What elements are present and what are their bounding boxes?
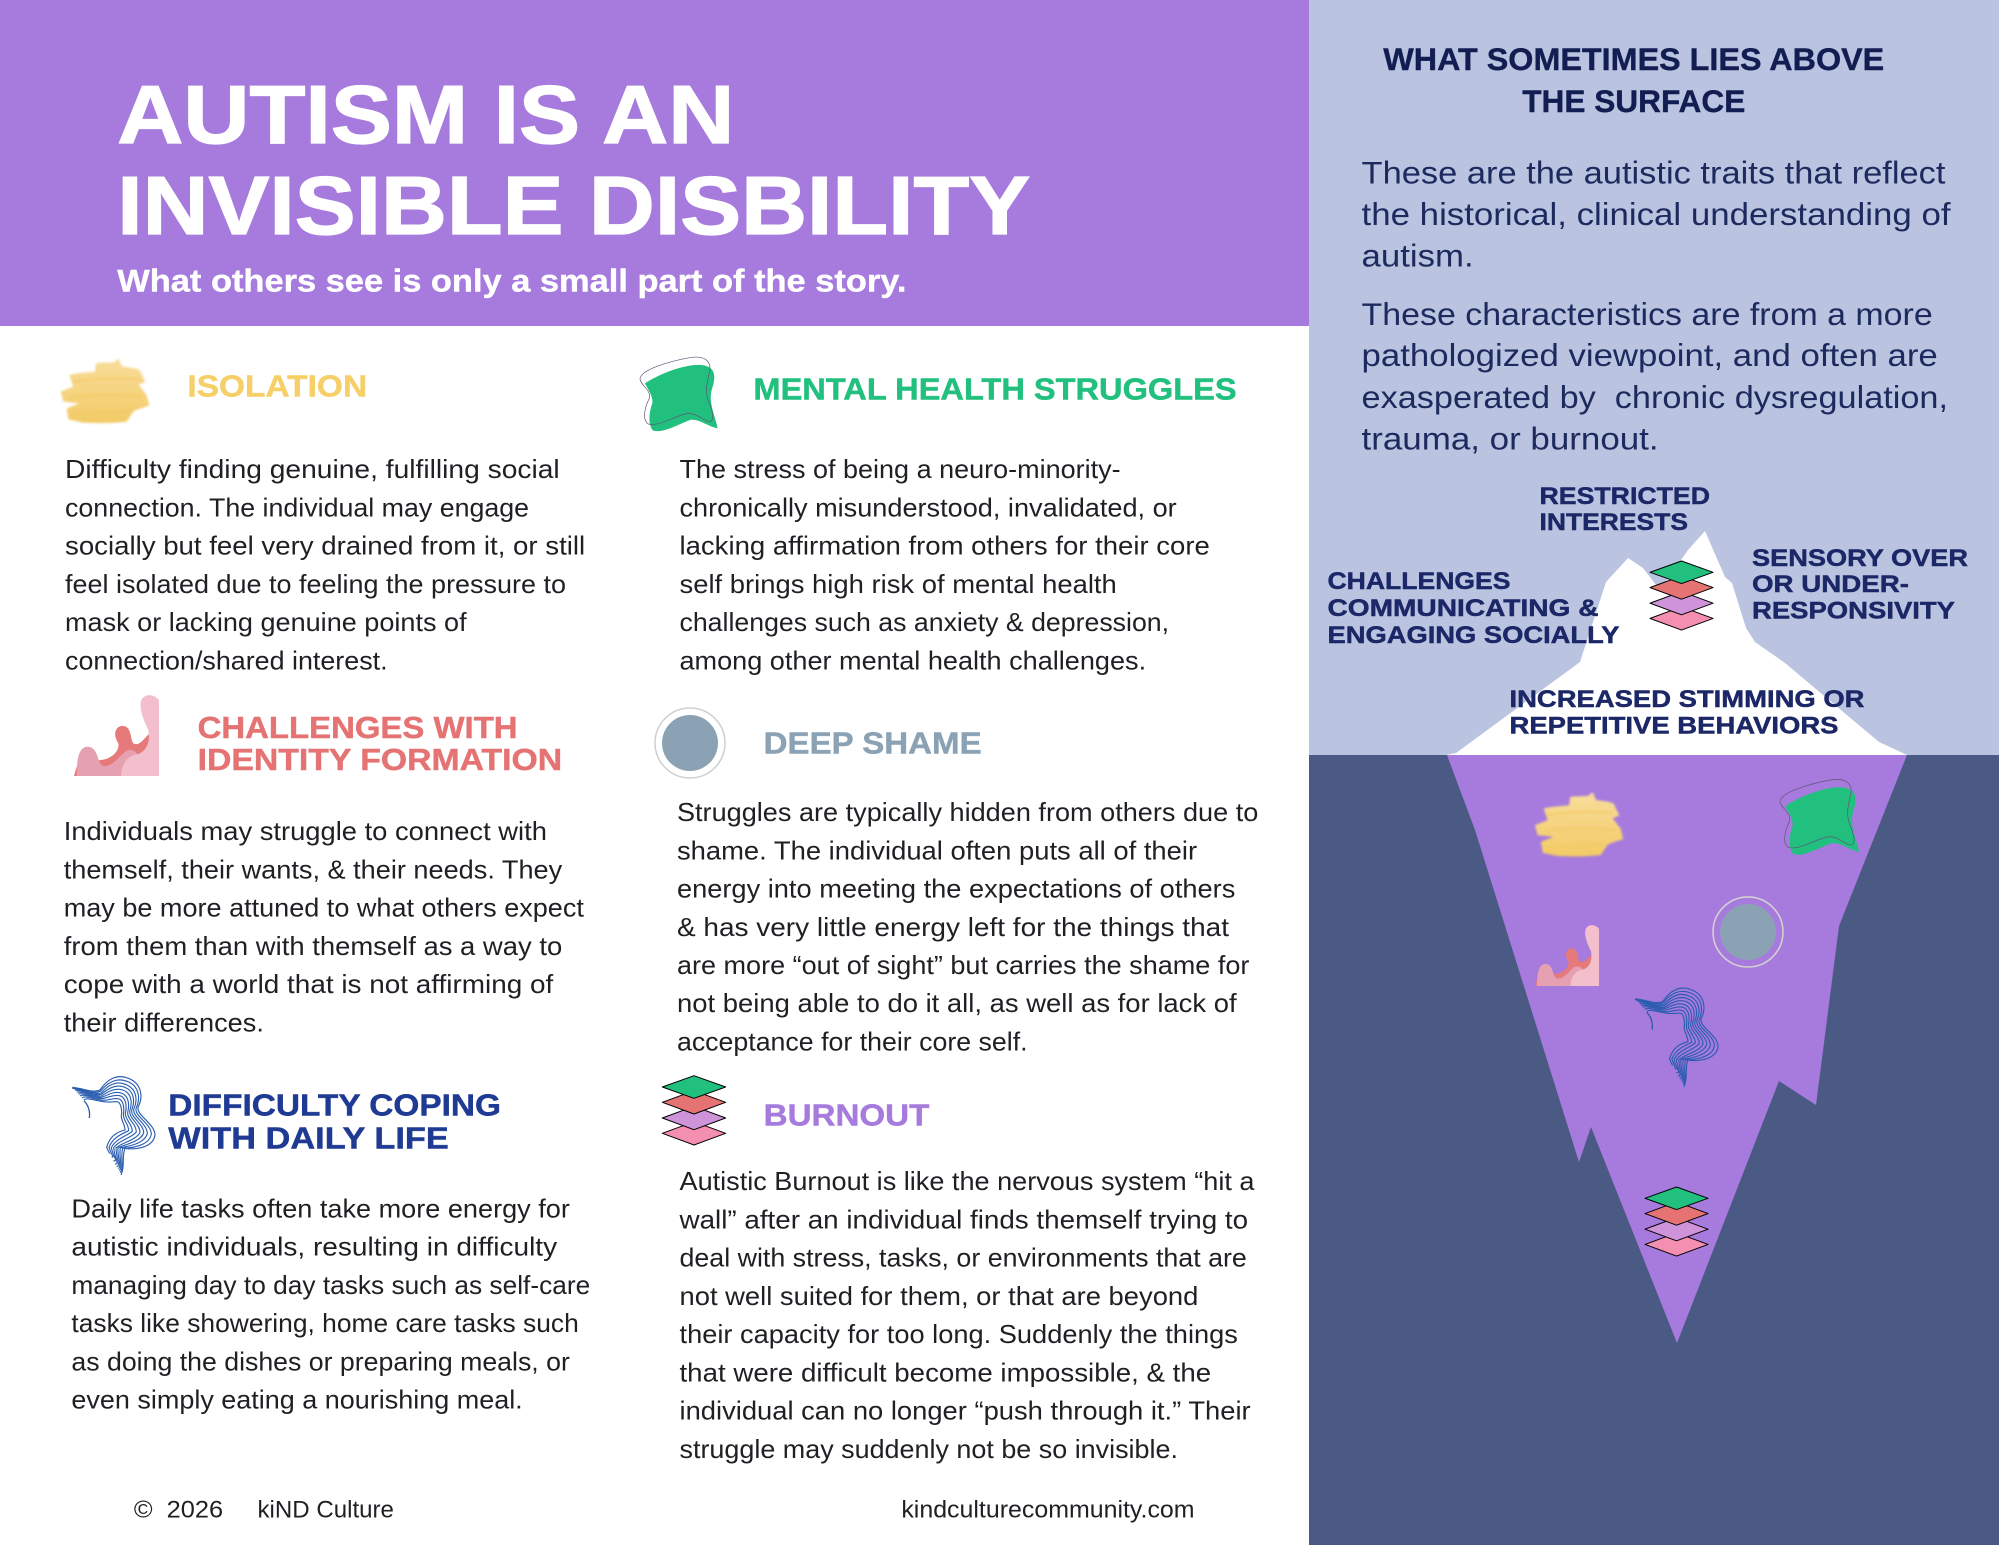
text: mental health struggles: challenges such as anxiety & depression, <box>680 607 1169 637</box>
icon: contour waves under water <box>1635 988 1718 1087</box>
text: mental health struggles <box>680 454 1210 675</box>
panel: challenges with identity formation <box>64 695 585 1037</box>
heading: isolation: ISOLATION <box>187 370 367 403</box>
text: isolation: mask or lacking genuine points of <box>65 607 467 637</box>
icon: pink waves under water <box>1535 925 1599 986</box>
text: burnout: wall” after an individual finds themself trying to <box>678 1204 1248 1234</box>
label: challenges communicating: COMMUNICATING & <box>1328 595 1598 622</box>
icon: circle under water <box>1713 897 1783 967</box>
text: burnout: not well suited for them, or that are beyond <box>680 1281 1198 1311</box>
title: AUTISM IS AN <box>117 68 734 161</box>
panel: isolation <box>61 358 585 675</box>
title: INVISIBLE DISBILITY <box>117 159 1030 252</box>
label: restricted interests: RESTRICTED <box>1540 483 1710 510</box>
text: identity formation: from them than with themself as a way to <box>64 931 562 961</box>
panel: difficulty coping with daily life <box>71 1077 590 1415</box>
text: pathologized viewpoint: trauma, or burnout. <box>1362 421 1659 456</box>
icon: grey circle <box>655 708 725 778</box>
text: difficulty coping: tasks like showering, home care tasks such <box>71 1308 579 1338</box>
text: burnout: their capacity for too long. Suddenly the things <box>680 1319 1238 1349</box>
text: difficulty coping <box>71 1194 590 1415</box>
icon: stacked layers <box>662 1076 726 1145</box>
heading: difficulty coping: WITH DAILY LIFE <box>168 1123 449 1156</box>
label: sensory responsivity: RESPONSIVITY <box>1752 598 1955 624</box>
text: isolation: feel isolated due to feeling the pressure to <box>65 569 566 599</box>
heading: identity formation: CHALLENGES WITH <box>198 712 518 745</box>
heading: burnout: BURNOUT <box>764 1100 930 1133</box>
text: deep shame: acceptance for their core self. <box>677 1026 1028 1056</box>
text: isolation: connection/shared interest. <box>65 645 388 675</box>
text: identity formation: themself, their wants, & their needs. They <box>64 854 562 884</box>
label: stimming: INCREASED STIMMING OR <box>1510 686 1864 713</box>
text: difficulty coping: even simply eating a nourishing meal. <box>71 1385 523 1415</box>
label: restricted interests <box>1540 483 1710 536</box>
panel: iceberg sidebar <box>1309 0 1999 1545</box>
text: pathologized viewpoint <box>1362 297 1948 456</box>
text: isolation: connection. The individual may engage <box>65 492 529 522</box>
text: identity formation: cope with a world that is not affirming of <box>64 969 554 999</box>
text: difficulty coping: managing day to day tasks such as self-care <box>71 1270 590 1300</box>
icon: green blob <box>640 357 718 431</box>
text: difficulty coping: as doing the dishes or preparing meals, or <box>71 1346 570 1376</box>
panel: burnout <box>662 1076 1255 1464</box>
text: mental health struggles: among other mental health challenges. <box>680 645 1146 675</box>
heading: what lies above the surface: WHAT SOMETIMES LIES ABOVE <box>1383 42 1884 77</box>
text: difficulty coping: autistic individuals, resulting in difficulty <box>71 1232 557 1262</box>
text: pathologized viewpoint: exasperated by chronic dysregulation, <box>1362 380 1948 415</box>
footer: © 2026 <box>134 1497 223 1524</box>
text: burnout: that were difficult become impossible, & the <box>680 1357 1211 1387</box>
label: challenges communicating: ENGAGING SOCIALLY <box>1328 622 1620 649</box>
label: sensory responsivity: OR UNDER- <box>1752 571 1909 598</box>
footer: kiND Culture <box>258 1497 394 1524</box>
text: isolation: socially but feel very drained from it, or still <box>65 531 585 561</box>
label: sensory responsivity <box>1752 545 1968 624</box>
heading: what lies above the surface <box>1383 42 1884 119</box>
icon: brush stroke under water <box>1535 792 1623 856</box>
text: deep shame: not being able to do it all, as well as for lack of <box>677 988 1237 1018</box>
text: mental health struggles: The stress of being a neuro-minority- <box>680 454 1121 484</box>
icon: pink waves <box>74 695 159 776</box>
panel: deep shame <box>655 708 1258 1056</box>
icon: yellow brush stroke <box>61 358 149 423</box>
iceberg above water <box>1446 531 1907 755</box>
heading: what lies above the surface: THE SURFACE <box>1522 84 1745 119</box>
icon: blue contour waves <box>72 1077 155 1175</box>
heading: difficulty coping <box>168 1090 501 1156</box>
text: burnout: Autistic Burnout is like the nervous system “hit a <box>680 1166 1255 1196</box>
text: burnout: deal with stress, tasks, or environments that are <box>680 1243 1247 1273</box>
text: deep shame: are more “out of sight” but carries the shame for <box>677 950 1250 980</box>
text: identity formation: may be more attuned to what others expect <box>64 893 585 923</box>
label: restricted interests: INTERESTS <box>1540 509 1688 536</box>
heading: mental health struggles: MENTAL HEALTH STRUGGLES <box>753 374 1237 407</box>
text: historical traits: autism. <box>1362 238 1474 273</box>
text: identity formation <box>64 816 585 1037</box>
icon: stacked layers under water <box>1645 1187 1708 1256</box>
text: deep shame: & has very little energy left for the things that <box>677 912 1230 942</box>
heading: identity formation <box>198 712 562 777</box>
text: mental health struggles: lacking affirmation from others for their core <box>680 531 1210 561</box>
text: deep shame: Struggles are typically hidden from others due to <box>677 797 1258 827</box>
text: deep shame: shame. The individual often puts all of their <box>677 835 1197 865</box>
label: stimming <box>1510 686 1864 740</box>
text: historical traits: These are the autistic traits that reflect <box>1362 156 1946 191</box>
iceberg below water <box>1447 755 1907 1343</box>
text: identity formation: Individuals may struggle to connect with <box>64 816 547 846</box>
text: pathologized viewpoint: These characteristics are from a more <box>1362 297 1933 332</box>
text: deep shame: energy into meeting the expectations of others <box>677 874 1235 904</box>
text: historical traits: the historical, clinical understanding of <box>1362 197 1951 232</box>
text: isolation <box>65 454 585 675</box>
icon: stacked layers on iceberg tip <box>1650 561 1713 630</box>
label: stimming: REPETITIVE BEHAVIORS <box>1510 712 1838 740</box>
text: burnout: individual can no longer “push through it.” Their <box>680 1396 1251 1426</box>
text: mental health struggles: chronically misunderstood, invalidated, or <box>680 492 1177 522</box>
panel: mental health struggles <box>640 357 1237 675</box>
header banner <box>0 0 1309 326</box>
text: deep shame <box>677 797 1258 1056</box>
text: burnout: struggle may suddenly not be so invisible. <box>680 1434 1178 1464</box>
icon: green blob under water <box>1780 779 1859 855</box>
heading: deep shame: DEEP SHAME <box>764 727 982 760</box>
footer: kindculturecommunity.com <box>901 1497 1195 1524</box>
text: isolation: Difficulty finding genuine, fulfilling social <box>65 454 560 484</box>
label: challenges communicating <box>1328 568 1620 649</box>
subtitle: What others see is only a small part of the story. <box>117 263 906 298</box>
text: mental health struggles: self brings high risk of mental health <box>680 569 1117 599</box>
heading: identity formation: IDENTITY FORMATION <box>198 744 562 777</box>
text: pathologized viewpoint: pathologized viewpoint, and often are <box>1362 338 1938 373</box>
text: identity formation: their differences. <box>64 1007 264 1037</box>
label: sensory responsivity: SENSORY OVER <box>1752 545 1968 572</box>
text: historical traits <box>1362 156 1951 273</box>
footer <box>134 1497 1195 1524</box>
title <box>117 68 1030 252</box>
heading: difficulty coping: DIFFICULTY COPING <box>168 1090 501 1123</box>
text: difficulty coping: Daily life tasks often take more energy for <box>71 1194 570 1224</box>
label: challenges communicating: CHALLENGES <box>1328 568 1510 595</box>
text: burnout <box>678 1166 1255 1464</box>
